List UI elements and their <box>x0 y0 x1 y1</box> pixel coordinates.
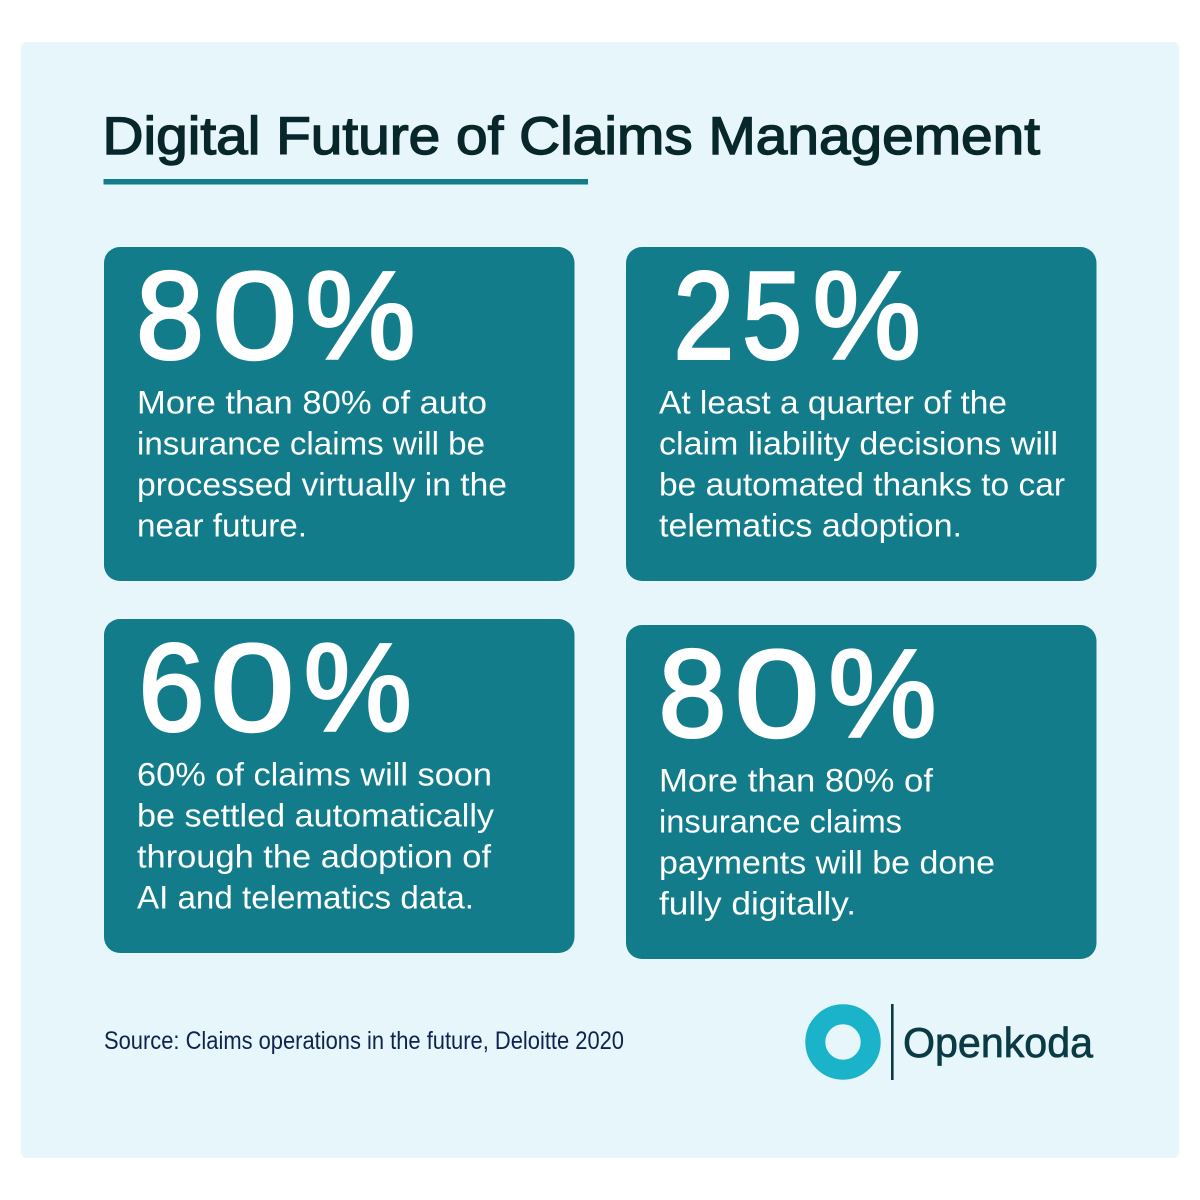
icon: ring <box>815 1014 871 1070</box>
text: payments description: fully digitally. <box>659 886 856 922</box>
panel: 60% settled automatically <box>104 619 574 953</box>
text: auto claims description: insurance claims will be <box>137 426 485 462</box>
panel: 80% digital payments <box>626 625 1096 959</box>
text: auto claims description: near future. <box>137 508 307 544</box>
stat: 80%: % <box>306 248 416 386</box>
text: settlement description <box>137 756 494 916</box>
stat: 80%: 0 <box>734 626 820 764</box>
source note: Source: Claims operations in the future, Deloitte 2020 <box>104 1027 624 1055</box>
stat: 60%: 0 <box>210 620 294 758</box>
text: auto claims description: More than 80% of auto <box>137 384 487 420</box>
text: settlement description: be settled automatically <box>137 798 494 834</box>
text: liability description: telematics adoption. <box>659 508 962 544</box>
text: liability description: claim liability decisions will <box>659 426 1058 462</box>
logo: Openkoda <box>815 1004 1094 1080</box>
text: payments description: payments will be done <box>659 844 995 880</box>
text: liability description: At least a quarter of the <box>659 384 1007 420</box>
text: payments description <box>659 762 995 922</box>
stat: 60%: 6 <box>138 620 204 758</box>
stat: 60%: % <box>304 620 412 758</box>
text: settlement description: 60% of claims will soon <box>137 756 492 792</box>
stat: 25%: 5 <box>742 248 802 386</box>
text: liability description <box>659 384 1065 544</box>
text: auto claims description <box>137 384 507 544</box>
stat: 25%: 2 <box>674 248 734 386</box>
stat: 80%: 8 <box>658 626 726 764</box>
text: payments description: insurance claims <box>659 804 902 840</box>
stat: 80%: 0 <box>212 248 297 386</box>
stat: 80%: 8 <box>136 248 204 386</box>
logo divider <box>891 1004 894 1080</box>
panel: 25% liability decisions <box>626 247 1096 581</box>
panel: 80% auto claims <box>104 247 574 581</box>
text: payments description: More than 80% of <box>659 762 933 798</box>
logo wordmark: Openkoda <box>903 1019 1094 1066</box>
text: liability description: be automated thanks to car <box>659 466 1065 502</box>
text: settlement description: AI and telematics data. <box>137 880 474 916</box>
title underline <box>104 179 588 184</box>
text: settlement description: through the adoption of <box>137 838 491 874</box>
text: auto claims description: processed virtually in the <box>137 466 507 502</box>
stat: 80%: % <box>828 626 936 764</box>
stat: 25%: % <box>813 248 921 386</box>
title: Digital Future of Claims Management <box>102 107 1040 166</box>
